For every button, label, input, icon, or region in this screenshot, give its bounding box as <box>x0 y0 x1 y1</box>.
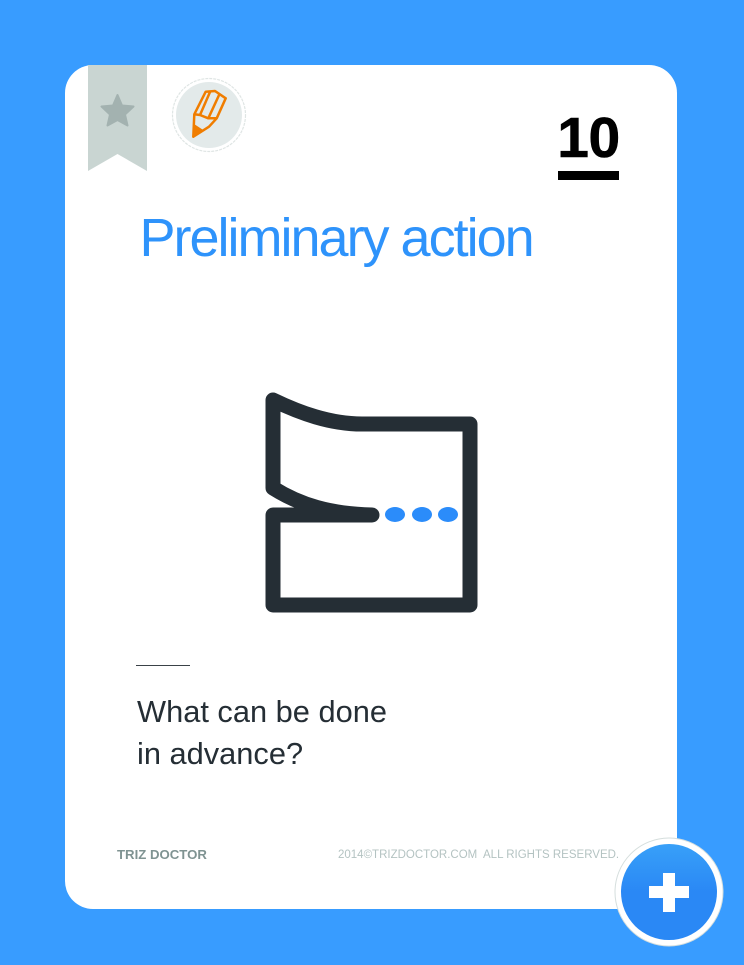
upper flap outline <box>273 400 470 605</box>
pencil tip <box>193 124 204 137</box>
footer brand: TRIZ DOCTOR <box>117 847 207 862</box>
icon: pencil badge <box>172 78 246 152</box>
icon: plus button <box>614 838 724 946</box>
number underline <box>558 171 619 180</box>
card number: 10 <box>557 106 620 170</box>
short divider <box>136 665 190 666</box>
question text: What can be done <box>137 694 387 729</box>
blue dots <box>385 507 458 522</box>
panel: white card <box>65 65 677 909</box>
diagram: preliminary cut in a square <box>266 392 478 612</box>
question text: in advance? <box>137 736 303 771</box>
question text <box>137 694 387 771</box>
icon: bookmark ribbon with star <box>88 65 147 171</box>
footer copyright: 2014©TRIZDOCTOR.COM ALL RIGHTS RESERVED. <box>338 849 619 861</box>
title: Preliminary action <box>140 208 533 268</box>
